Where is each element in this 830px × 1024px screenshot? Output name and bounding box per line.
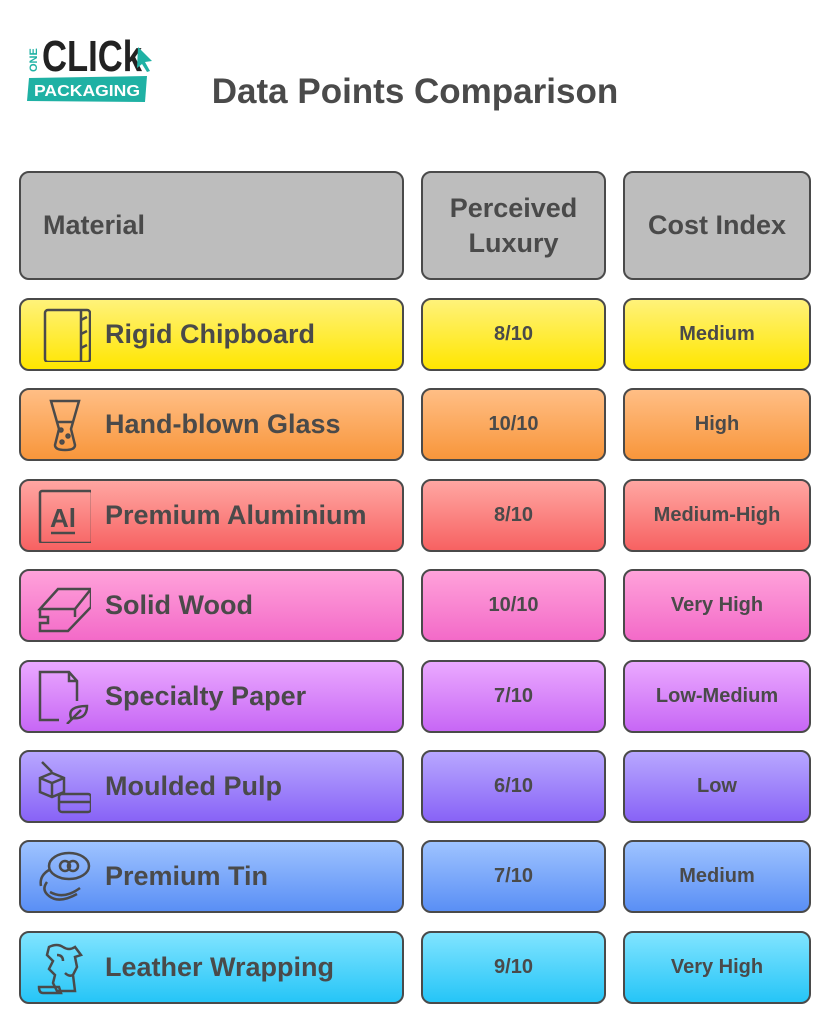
header: cost index <box>623 171 811 280</box>
row: Premium Aluminium <box>19 479 404 552</box>
row: Hand-blown Glass <box>19 388 404 461</box>
value <box>623 569 811 642</box>
icon: Al: Al <box>50 503 76 533</box>
value <box>421 840 606 913</box>
header: cost index: Cost Index <box>648 210 786 240</box>
value: 10/10 <box>488 413 539 435</box>
value <box>623 660 811 733</box>
value: 7/10 <box>494 865 533 887</box>
value <box>421 298 606 371</box>
value: High <box>695 413 739 435</box>
row: Rigid Chipboard: Rigid Chipboard <box>105 319 315 349</box>
header: perceived luxury: Perceived <box>450 192 577 222</box>
row: Premium Aluminium: Premium Aluminium <box>105 500 367 530</box>
value <box>421 479 606 552</box>
value <box>421 931 606 1004</box>
value: Low-Medium <box>656 685 778 707</box>
value <box>623 479 811 552</box>
row: Specialty Paper <box>19 660 404 733</box>
value <box>421 660 606 733</box>
icon: pulp <box>38 761 91 814</box>
icon: wood <box>37 588 91 632</box>
header: material <box>19 171 404 280</box>
icon: leather <box>38 944 83 994</box>
value: Very High <box>671 594 763 616</box>
icon: paper <box>38 670 88 724</box>
value <box>623 840 811 913</box>
value: Medium <box>679 865 755 887</box>
icon: chipboard <box>44 308 91 362</box>
value: 9/10 <box>494 956 533 978</box>
row: Rigid Chipboard <box>19 298 404 371</box>
row: Specialty Paper: Specialty Paper <box>105 681 306 711</box>
value: 8/10 <box>494 504 533 526</box>
value <box>421 750 606 823</box>
row: Moulded Pulp: Moulded Pulp <box>105 771 282 801</box>
value <box>623 931 811 1004</box>
value <box>421 569 606 642</box>
title: Data Points Comparison <box>212 72 618 111</box>
row: Premium Tin <box>19 840 404 913</box>
value: Low <box>697 775 737 797</box>
value <box>421 388 606 461</box>
value <box>623 388 811 461</box>
icon: Al <box>38 490 91 543</box>
header: perceived luxury: Luxury <box>468 228 559 258</box>
value <box>623 750 811 823</box>
row: Solid Wood <box>19 569 404 642</box>
icon: glass <box>49 400 81 452</box>
value: Medium-High <box>654 504 780 526</box>
logo: ONE <box>28 48 40 72</box>
value: Medium <box>679 323 755 345</box>
value: Very High <box>671 956 763 978</box>
logo <box>27 32 152 102</box>
row: Leather Wrapping <box>19 931 404 1004</box>
icon: tin <box>39 852 90 901</box>
header: perceived luxury <box>421 171 606 280</box>
row: Solid Wood: Solid Wood <box>105 590 253 620</box>
value: 8/10 <box>494 323 533 345</box>
row: Premium Tin: Premium Tin <box>105 861 268 891</box>
logo: PACKAGING <box>34 83 140 100</box>
row: Moulded Pulp <box>19 750 404 823</box>
header: material: Material <box>43 210 145 240</box>
row: Leather Wrapping: Leather Wrapping <box>105 952 334 982</box>
value <box>623 298 811 371</box>
row: Hand-blown Glass: Hand-blown Glass <box>105 409 341 439</box>
value: 7/10 <box>494 685 533 707</box>
value: 10/10 <box>488 594 539 616</box>
value: 6/10 <box>494 775 533 797</box>
